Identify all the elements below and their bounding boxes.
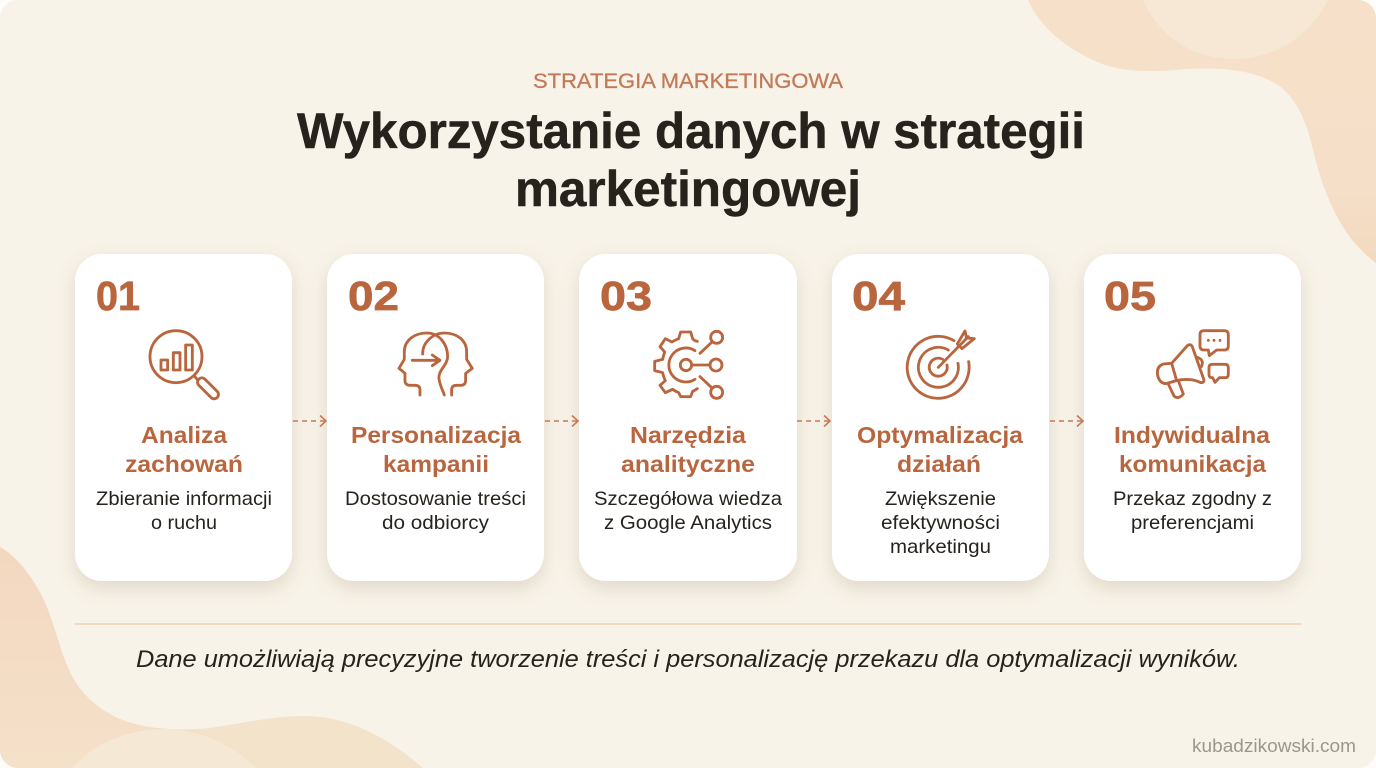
number 05: 05	[1104, 273, 1156, 319]
icon: magnifier with bars	[150, 331, 220, 401]
blob: bottom left light circle	[72, 729, 257, 768]
description: Przekaz zgodny z	[1113, 488, 1272, 510]
icon: megaphone with speech bubbles	[1157, 331, 1228, 398]
arrow: step 3 to 4	[797, 416, 830, 426]
heading	[1114, 422, 1271, 477]
icon: target with arrow	[907, 331, 974, 398]
arrow: step 2 to 3	[545, 416, 578, 426]
blob: bottom left peach	[0, 547, 200, 768]
watermark: kubadzikowski.com	[1192, 736, 1356, 756]
icon: gear with nodes	[655, 331, 723, 398]
description: marketingu	[890, 536, 991, 558]
heading: komunikacja	[1119, 451, 1267, 477]
title	[297, 103, 1085, 217]
number 01: 01	[96, 273, 140, 319]
description	[345, 488, 526, 534]
heading: Analiza	[141, 422, 228, 448]
eyebrow: STRATEGIA MARKETINGOWA	[533, 70, 843, 93]
heading: kampanii	[383, 451, 489, 477]
panel: step 01	[75, 254, 292, 581]
icon: two heads with arrow	[399, 333, 472, 395]
description	[881, 488, 1000, 558]
blob: bottom left sand	[198, 716, 423, 768]
title: Wykorzystanie danych w strategii	[297, 103, 1085, 159]
heading: Indywidualna	[1114, 422, 1271, 448]
description: Szczegółowa wiedza	[594, 488, 782, 510]
heading: Optymalizacja	[857, 422, 1024, 448]
description: Dostosowanie treści	[345, 488, 526, 510]
description: o ruchu	[151, 512, 217, 534]
description	[1113, 488, 1272, 534]
number 03: 03	[600, 273, 652, 319]
heading: zachowań	[125, 451, 243, 477]
number 04: 04	[852, 273, 905, 319]
description: Zwiększenie	[885, 488, 996, 510]
heading: Personalizacja	[351, 422, 522, 448]
description: preferencjami	[1131, 512, 1254, 534]
heading	[125, 422, 243, 477]
panel: step 03	[579, 254, 797, 581]
arrow: step 4 to 5	[1050, 416, 1083, 426]
heading: analityczne	[621, 451, 755, 477]
heading	[857, 422, 1024, 477]
description	[96, 488, 272, 534]
heading	[621, 422, 755, 477]
heading	[351, 422, 522, 477]
title: marketingowej	[515, 161, 861, 217]
blob: top right peach	[1028, 0, 1376, 263]
footer statement: Dane umożliwiają precyzyjne tworzenie treści i personalizację przekazu dla optymalizacji wyników.	[136, 646, 1240, 673]
description: z Google Analytics	[604, 512, 772, 534]
description: Zbieranie informacji	[96, 488, 272, 510]
blob: top right light circle	[1143, 0, 1328, 59]
description: efektywności	[881, 512, 1000, 534]
number 02: 02	[348, 273, 399, 319]
arrow: step 1 to 2	[293, 416, 326, 426]
description	[594, 488, 782, 534]
description: do odbiorcy	[382, 512, 489, 534]
heading: działań	[897, 451, 981, 477]
heading: Narzędzia	[630, 422, 747, 448]
panel: step 02	[327, 254, 544, 581]
panel: step 05	[1084, 254, 1301, 581]
panel: step 04	[832, 254, 1049, 581]
